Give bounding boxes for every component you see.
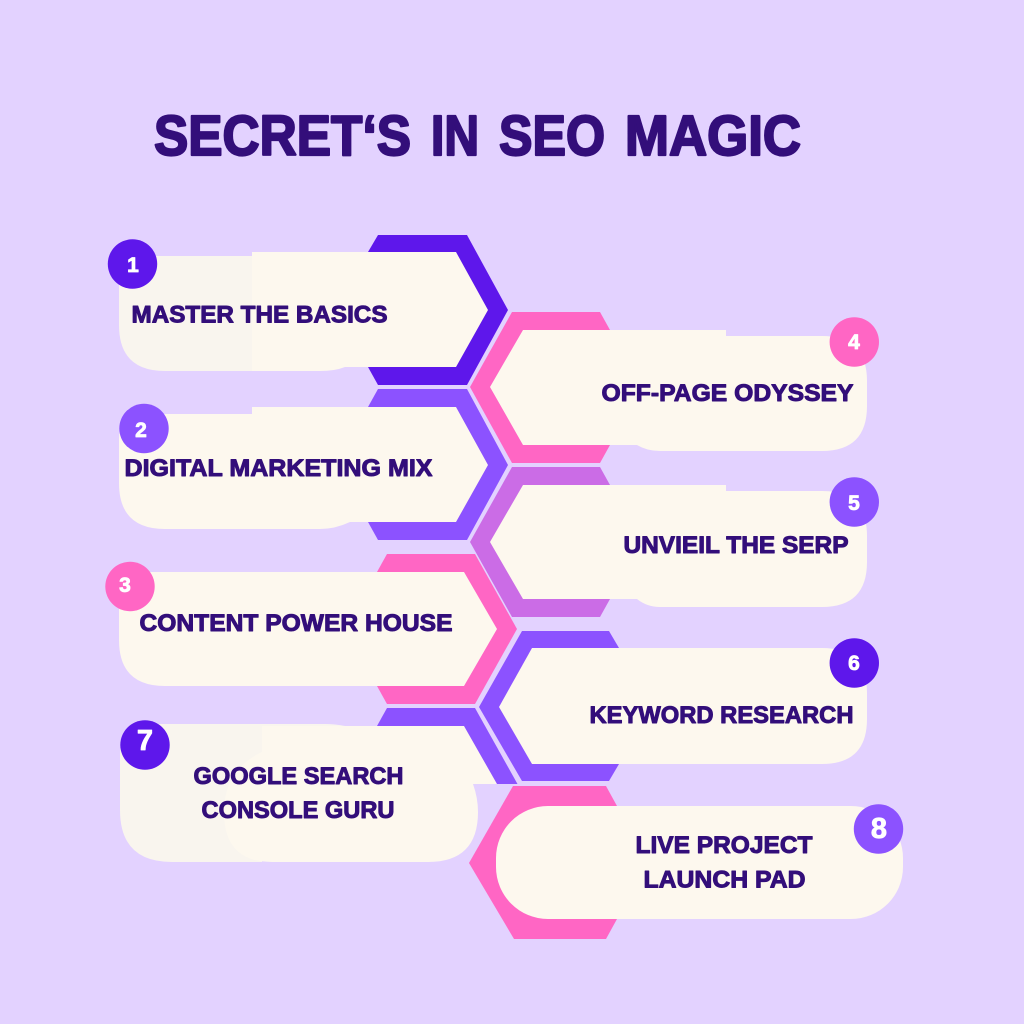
number badge 5: [830, 477, 879, 527]
number badge 7: [120, 720, 170, 770]
number badge 2: [119, 404, 169, 453]
label 8: LIVE PROJECT: [636, 832, 813, 859]
hexagon frame 3: [377, 554, 517, 704]
label 6: KEYWORD RESEARCH: [590, 702, 854, 729]
hexagon frame 8: [469, 786, 617, 939]
card left segment 1: [119, 256, 253, 371]
label 3: CONTENT POWER HOUSE: [140, 610, 452, 637]
card 4: [490, 330, 867, 451]
label 2: DIGITAL MARKETING MIX: [124, 455, 432, 482]
hexagon frame 5: [470, 467, 610, 617]
panel: step 5 unvieil the serp: [470, 467, 879, 617]
title: [154, 104, 801, 168]
number badge 1: 1: [127, 254, 139, 277]
panel: step 1 master the basics: [108, 235, 508, 385]
card 5: [490, 485, 867, 607]
number badge 3: 3: [119, 574, 131, 597]
title: SEO: [499, 104, 605, 168]
label 7: [194, 763, 404, 824]
card 8: [496, 806, 903, 919]
panel: step 7 google search console guru: [120, 708, 518, 862]
panel: step 6 keyword research: [479, 631, 879, 781]
card left segment 7: [120, 724, 345, 862]
panel: step 2 digital marketing mix: [119, 389, 508, 540]
title: MAGIC: [625, 104, 801, 168]
number badge 6: 6: [848, 652, 860, 675]
number badge 8: [854, 804, 903, 854]
card right segment 7: [224, 726, 497, 862]
card 2: [119, 407, 488, 529]
number badge 4: 4: [848, 331, 860, 354]
panel: step 3 content power house: [105, 554, 517, 704]
card right segment 1: [252, 252, 488, 371]
number badge 7: 7: [137, 725, 153, 757]
number badge 1: [108, 239, 157, 289]
label 4: OFF-PAGE ODYSSEY: [602, 380, 854, 407]
panel: step 4 off-page odyssey: [470, 312, 879, 463]
panel: step 8 live project launch pad: [469, 786, 903, 939]
hexagon frame 1: [368, 235, 508, 385]
label 7: CONSOLE GURU: [202, 797, 394, 824]
label 5: UNVIEIL THE SERP: [624, 532, 848, 559]
number badge 8: 8: [871, 813, 887, 845]
hexagon frame 6: [479, 631, 619, 781]
card 3: [119, 572, 497, 686]
title: SECRET‘S: [154, 104, 411, 168]
number badge 6: [830, 638, 879, 688]
hexagon frame 7: [377, 708, 518, 784]
card 6: [499, 648, 867, 764]
hexagon frame 4: [470, 312, 610, 463]
number badge 4: [830, 317, 879, 367]
number badge 2: 2: [135, 419, 147, 442]
number badge 3: [105, 562, 155, 611]
number badge 5: 5: [848, 492, 860, 515]
label 8: LAUNCH PAD: [644, 866, 806, 894]
label 7: GOOGLE SEARCH: [194, 763, 404, 790]
hexagon frame 2: [368, 389, 508, 540]
label 1: MASTER THE BASICS: [132, 302, 388, 328]
title: IN: [431, 104, 479, 168]
label 8: [636, 832, 813, 894]
